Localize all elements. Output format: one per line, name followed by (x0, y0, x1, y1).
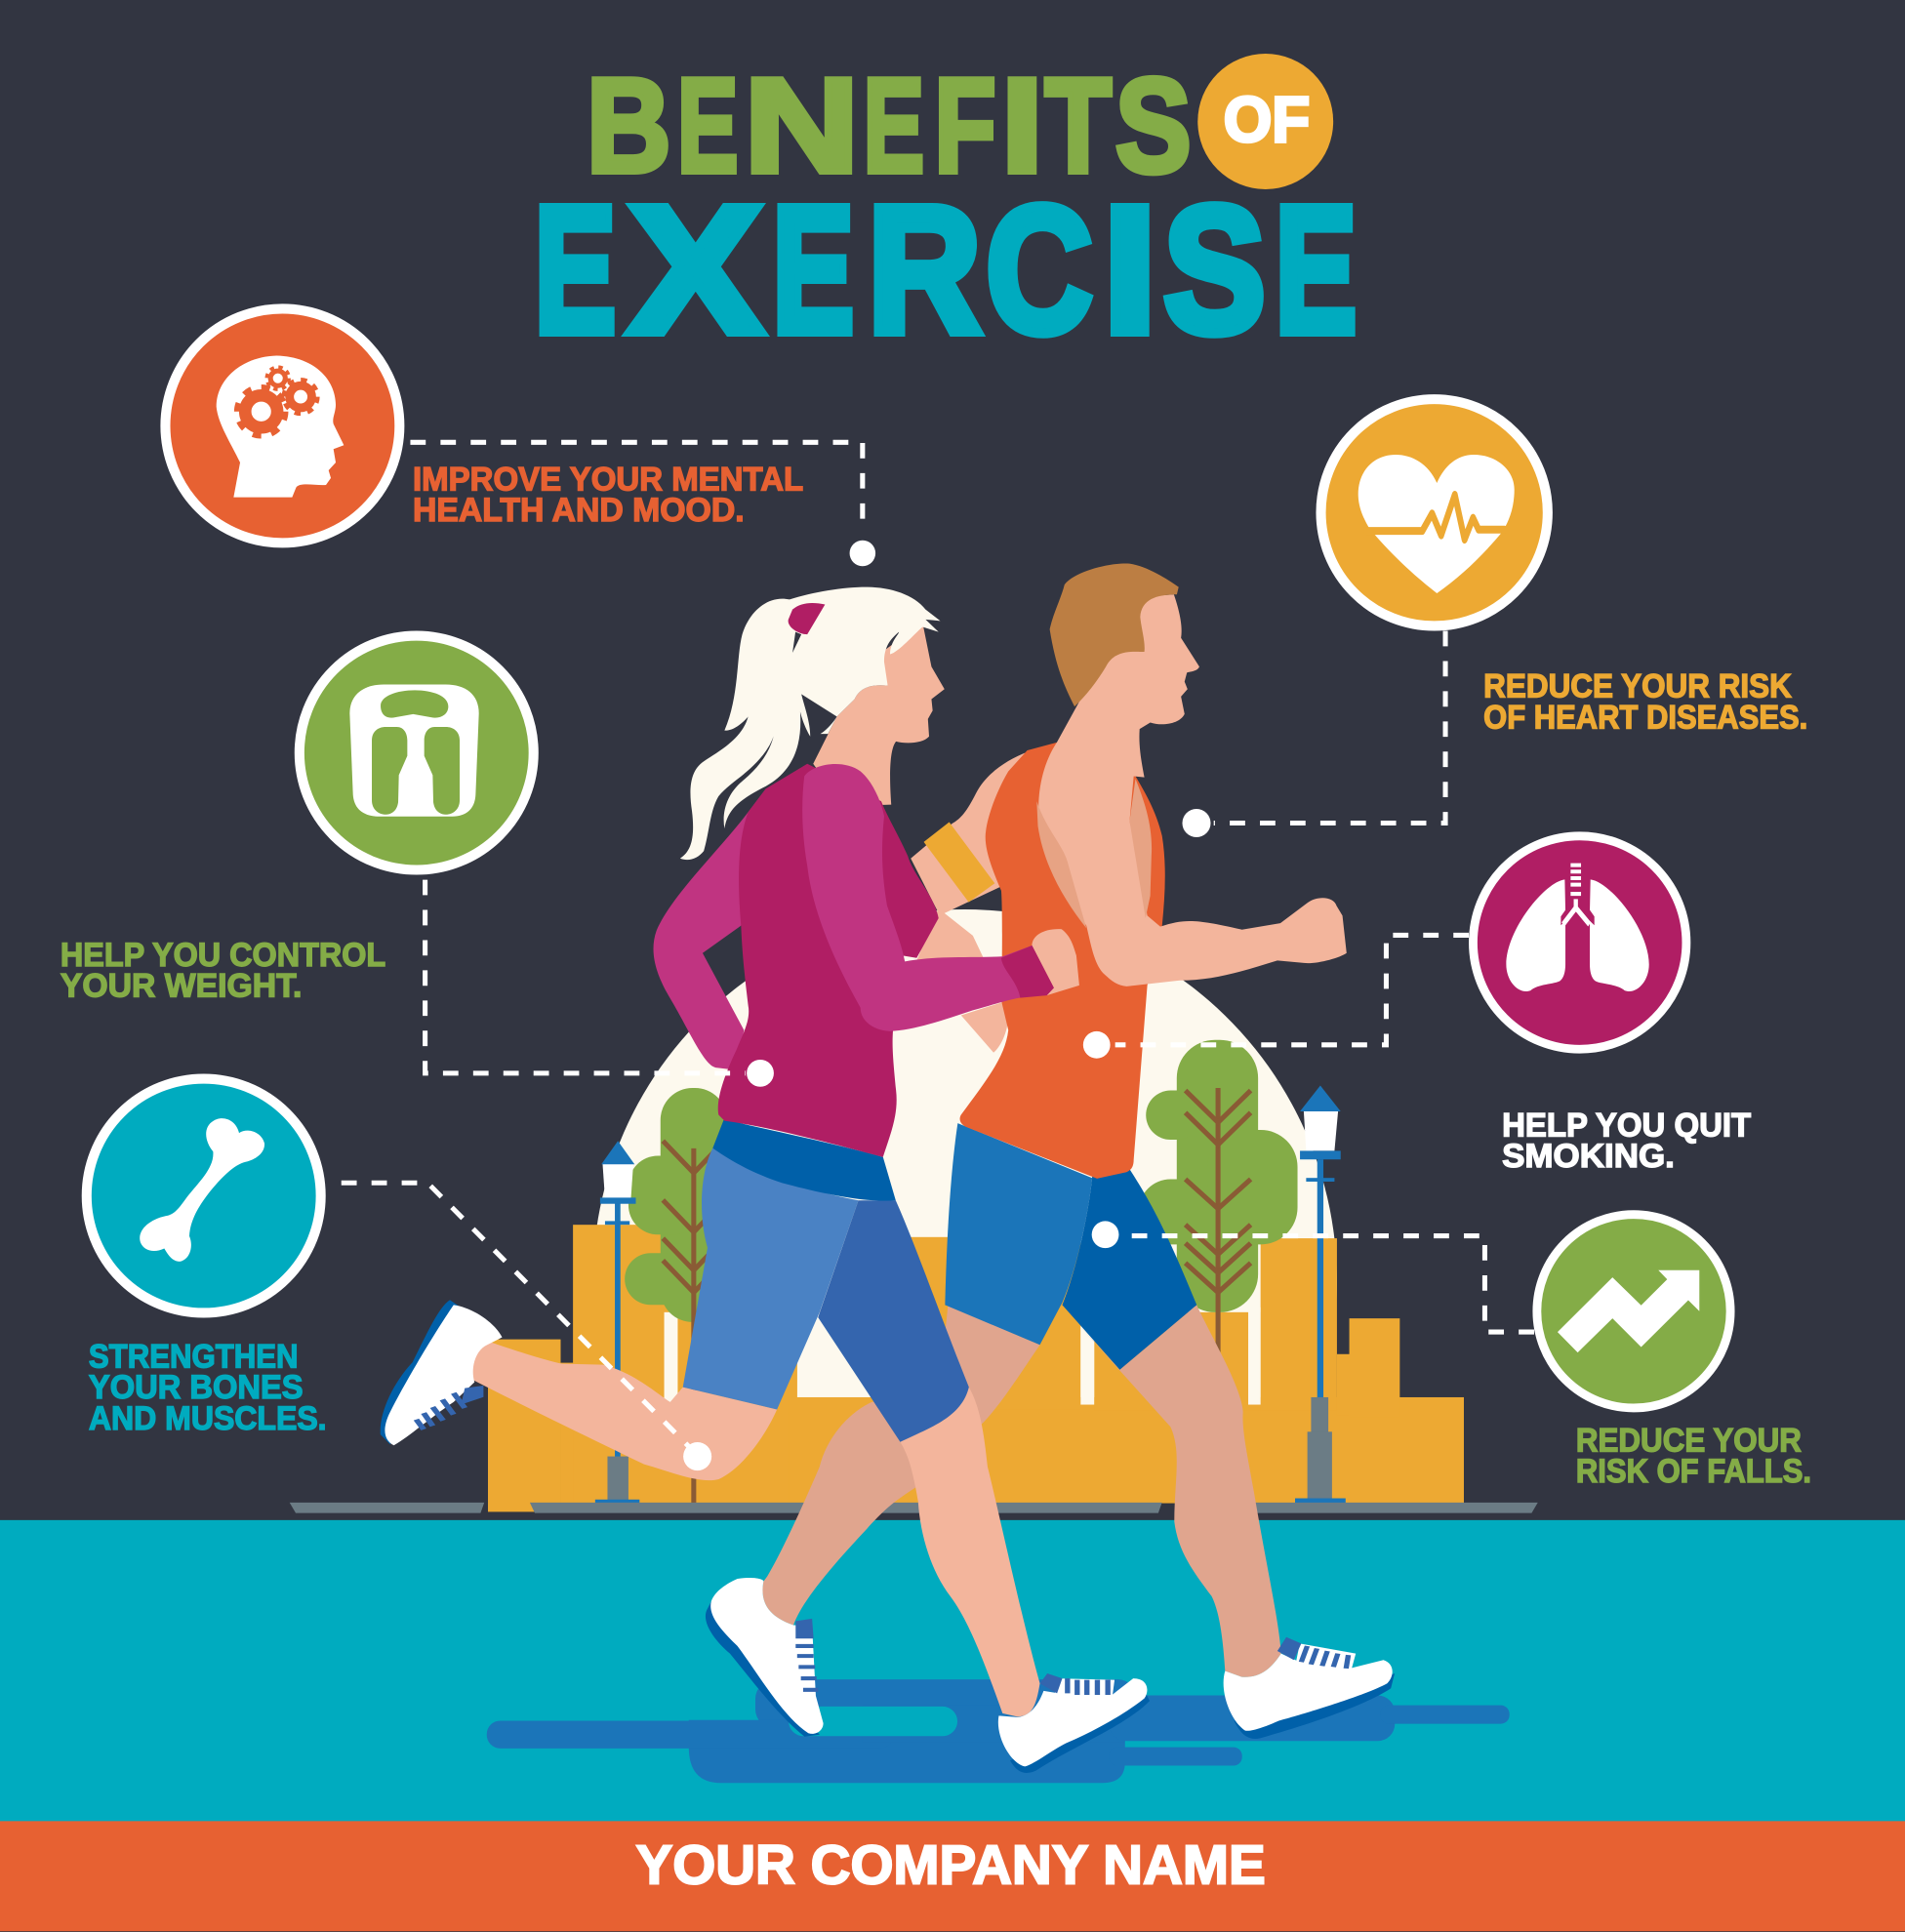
icon: heart (1321, 399, 1548, 625)
of badge (1197, 54, 1333, 189)
right tree (1139, 1040, 1298, 1353)
sweater cuff (1001, 946, 1054, 998)
title line: exercise: E (1276, 170, 1357, 371)
label: weight (61, 937, 385, 1005)
title line: benefits: E (864, 52, 924, 201)
man runner: legs and shoes (706, 1305, 1395, 1739)
label: smoking (1502, 1107, 1751, 1175)
sun dome (592, 909, 1337, 1405)
footer text: YOUR COMPANY NAME (636, 1835, 1266, 1897)
woman front leg (900, 1388, 1040, 1716)
wristband (924, 822, 994, 903)
hair scrunchie (789, 603, 825, 634)
title line: benefits: B (587, 52, 670, 201)
label: mental health (413, 462, 803, 529)
label: falls: RISK OF FALLS. (1576, 1453, 1811, 1490)
connector: mental health (410, 442, 875, 566)
hair slit (792, 632, 801, 653)
title line: exercise: R (868, 170, 981, 371)
title line: benefits: E (677, 52, 738, 201)
ground band (0, 1520, 1905, 1822)
title line: benefits: I (1001, 52, 1043, 201)
label: weight: HELP YOU CONTROL (61, 937, 385, 974)
connector: lungs (1083, 935, 1469, 1059)
footer band (0, 1821, 1905, 1931)
label: bones: STRENGTHEN (89, 1339, 299, 1376)
title line: exercise: I (1103, 170, 1157, 371)
right street lamp (1295, 1085, 1346, 1504)
label: smoking: SMOKING. (1502, 1138, 1675, 1175)
man rear leg (762, 1305, 1040, 1626)
pavement strips (290, 1503, 1538, 1513)
skin shading (1036, 801, 1086, 928)
woman runner: legs and shoes (381, 1119, 1150, 1773)
sweater rear arm (654, 788, 766, 1070)
title line: exercise: X (629, 170, 762, 371)
woman raised leg (471, 1343, 777, 1480)
buildings (488, 1225, 1464, 1511)
woman face and neck (813, 623, 945, 806)
label: bones: AND MUSCLES. (89, 1400, 327, 1437)
of badge: OF (1224, 84, 1310, 155)
title line: benefits: F (934, 52, 996, 201)
label: bones (89, 1339, 327, 1437)
title line: benefits: S (1115, 52, 1192, 201)
icon: bone (87, 1079, 321, 1312)
label: weight: YOUR WEIGHT. (61, 968, 302, 1005)
man hair (1050, 563, 1179, 706)
man runner: torso, arm and head (960, 563, 1347, 1179)
icon: weight scale (300, 636, 534, 870)
label: heart: REDUCE YOUR RISK (1483, 668, 1792, 705)
title (535, 52, 1357, 371)
runner shadows (487, 1679, 1510, 1783)
label: falls: REDUCE YOUR (1576, 1423, 1802, 1460)
woman hand (1032, 929, 1079, 995)
woman runner: upper body (654, 587, 1079, 1157)
man rear shoe (706, 1578, 824, 1737)
connector: weight (426, 880, 774, 1087)
man runner: shorts (945, 1123, 1196, 1370)
title line: benefits: T (1045, 52, 1112, 201)
label: mental health: HEALTH AND MOOD. (413, 492, 745, 529)
tank top (960, 743, 1165, 1179)
sweater front arm (802, 764, 1054, 1031)
label: heart: OF HEART DISEASES. (1483, 699, 1807, 736)
connector: bones (342, 1183, 711, 1470)
man front leg (1081, 1305, 1281, 1677)
connector: falls (1092, 1221, 1534, 1332)
sweater body (718, 764, 939, 1157)
woman front shoe (998, 1673, 1150, 1773)
woman hair (680, 587, 941, 860)
left street lamp (595, 1141, 639, 1505)
label: bones: YOUR BONES (89, 1369, 304, 1406)
connector: heart (1182, 631, 1445, 837)
left tree (625, 1088, 727, 1504)
man runner: far arm (911, 751, 1029, 1053)
title line: exercise: C (986, 170, 1092, 371)
icon: lungs (1473, 836, 1686, 1049)
label: heart (1483, 668, 1807, 736)
city background scene (290, 909, 1538, 1513)
title line: exercise: E (535, 170, 616, 371)
man front shoe (1224, 1637, 1395, 1739)
title line: exercise: E (773, 170, 854, 371)
label: falls (1576, 1423, 1811, 1490)
icon: brain head (165, 308, 399, 543)
woman shorts (683, 1119, 969, 1442)
label: mental health: IMPROVE YOUR MENTAL (413, 462, 803, 499)
skin (1038, 594, 1347, 986)
title line: exercise: S (1163, 170, 1266, 371)
building windows (665, 1308, 1261, 1405)
title line: benefits: N (744, 52, 859, 201)
icon: rising arrow (1537, 1215, 1730, 1408)
woman raised shoe (381, 1300, 503, 1445)
label: smoking: HELP YOU QUIT (1502, 1107, 1751, 1144)
